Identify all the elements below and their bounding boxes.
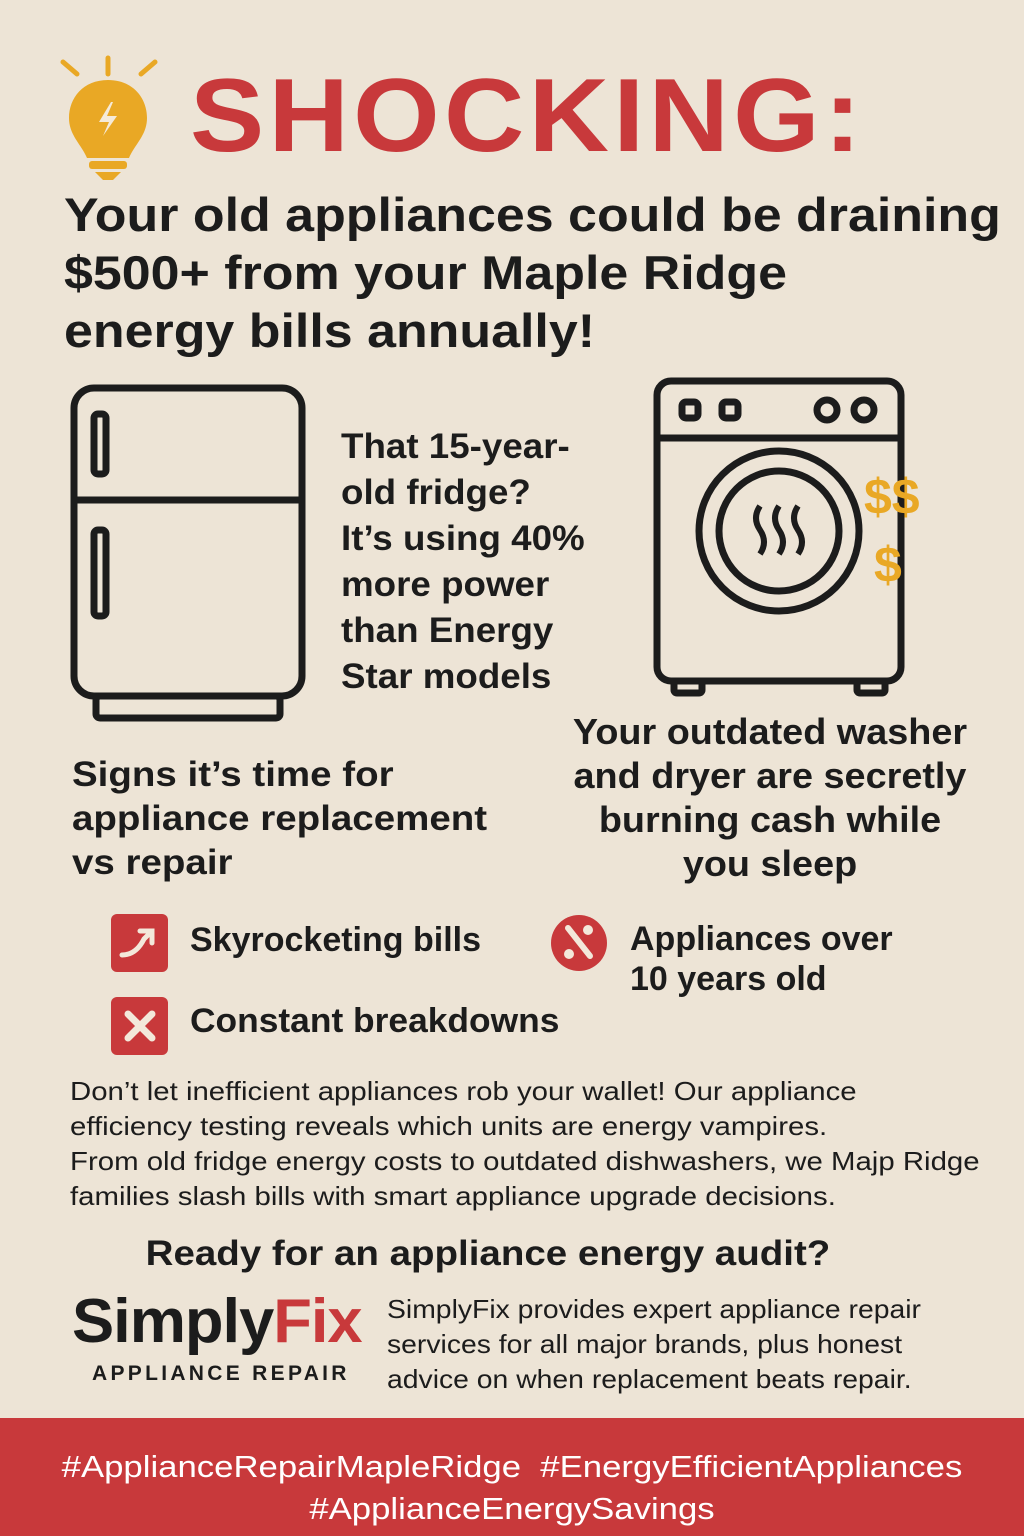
hashtags: #ApplianceEnergySavings (309, 1491, 715, 1526)
subtitle: $500+ from your Maple Ridge (64, 246, 787, 299)
logo: SimplyFix (72, 1287, 362, 1356)
title: SHOCKING: (190, 58, 865, 174)
text: fridge fact: It’s using 40% (341, 519, 585, 558)
text: fridge fact: old fridge? (341, 473, 531, 512)
list item: age: Appliances over (630, 920, 893, 958)
text: company description (387, 1294, 921, 1394)
icon: arrow up (111, 914, 168, 972)
subtitle: energy bills annually! (64, 304, 595, 357)
subtitle: Your old appliances could be draining (64, 188, 1001, 241)
text: company description: SimplyFix provides expert appliance repair (387, 1294, 921, 1324)
text: company description: advice on when replacement beats repair. (387, 1364, 912, 1394)
icon: washer with dollars (654, 378, 920, 696)
icon: washer with dollars: $ (874, 537, 902, 593)
subtitle (64, 188, 1001, 357)
text: washer: Your outdated washer (573, 711, 967, 752)
heading: audit: Ready for an appliance energy audit? (146, 1234, 830, 1273)
logo: APPLIANCE REPAIR (92, 1362, 350, 1385)
heading: signs: vs repair (72, 843, 233, 882)
heading: signs (72, 755, 487, 882)
body text: efficiency testing reveals which units are energy vampires. (70, 1111, 827, 1141)
footer banner (0, 1418, 1024, 1536)
list item: age (551, 915, 893, 998)
text: washer: and dryer are secretly (574, 755, 966, 796)
icon: tools (551, 915, 607, 971)
list item: breakdowns: Constant breakdowns (190, 1002, 559, 1040)
text: washer: burning cash while (599, 799, 941, 840)
text: washer (573, 711, 967, 884)
text: fridge fact: Star models (341, 657, 551, 696)
body text: Don’t let inefficient appliances rob your wallet! Our appliance (70, 1076, 857, 1106)
list item: bills: Skyrocketing bills (190, 921, 481, 959)
icon: cross (111, 997, 168, 1055)
body text: families slash bills with smart appliance upgrade decisions. (70, 1181, 836, 1211)
body text: From old fridge energy costs to outdated dishwashers, we Majp Ridge (70, 1146, 980, 1176)
heading: signs: appliance replacement (72, 799, 487, 838)
text: company description: services for all major brands, plus honest (387, 1329, 902, 1359)
text: fridge fact (341, 427, 585, 696)
icon: washer with dollars: $$ (864, 469, 920, 525)
text: fridge fact: more power (341, 565, 549, 604)
text: fridge fact: than Energy (341, 611, 553, 650)
list item: age: 10 years old (630, 960, 827, 998)
icon: fridge (70, 384, 306, 722)
heading: signs: Signs it’s time for (72, 755, 394, 794)
list item: breakdowns (111, 997, 559, 1055)
body text (70, 1076, 980, 1211)
text: washer: you sleep (683, 843, 857, 884)
icon: light bulb (60, 56, 158, 180)
text: fridge fact: That 15-year- (341, 427, 570, 466)
list item: bills (111, 914, 481, 972)
hashtags (62, 1449, 962, 1526)
hashtags: #ApplianceRepairMapleRidge #EnergyEfficientAppliances (62, 1449, 962, 1484)
